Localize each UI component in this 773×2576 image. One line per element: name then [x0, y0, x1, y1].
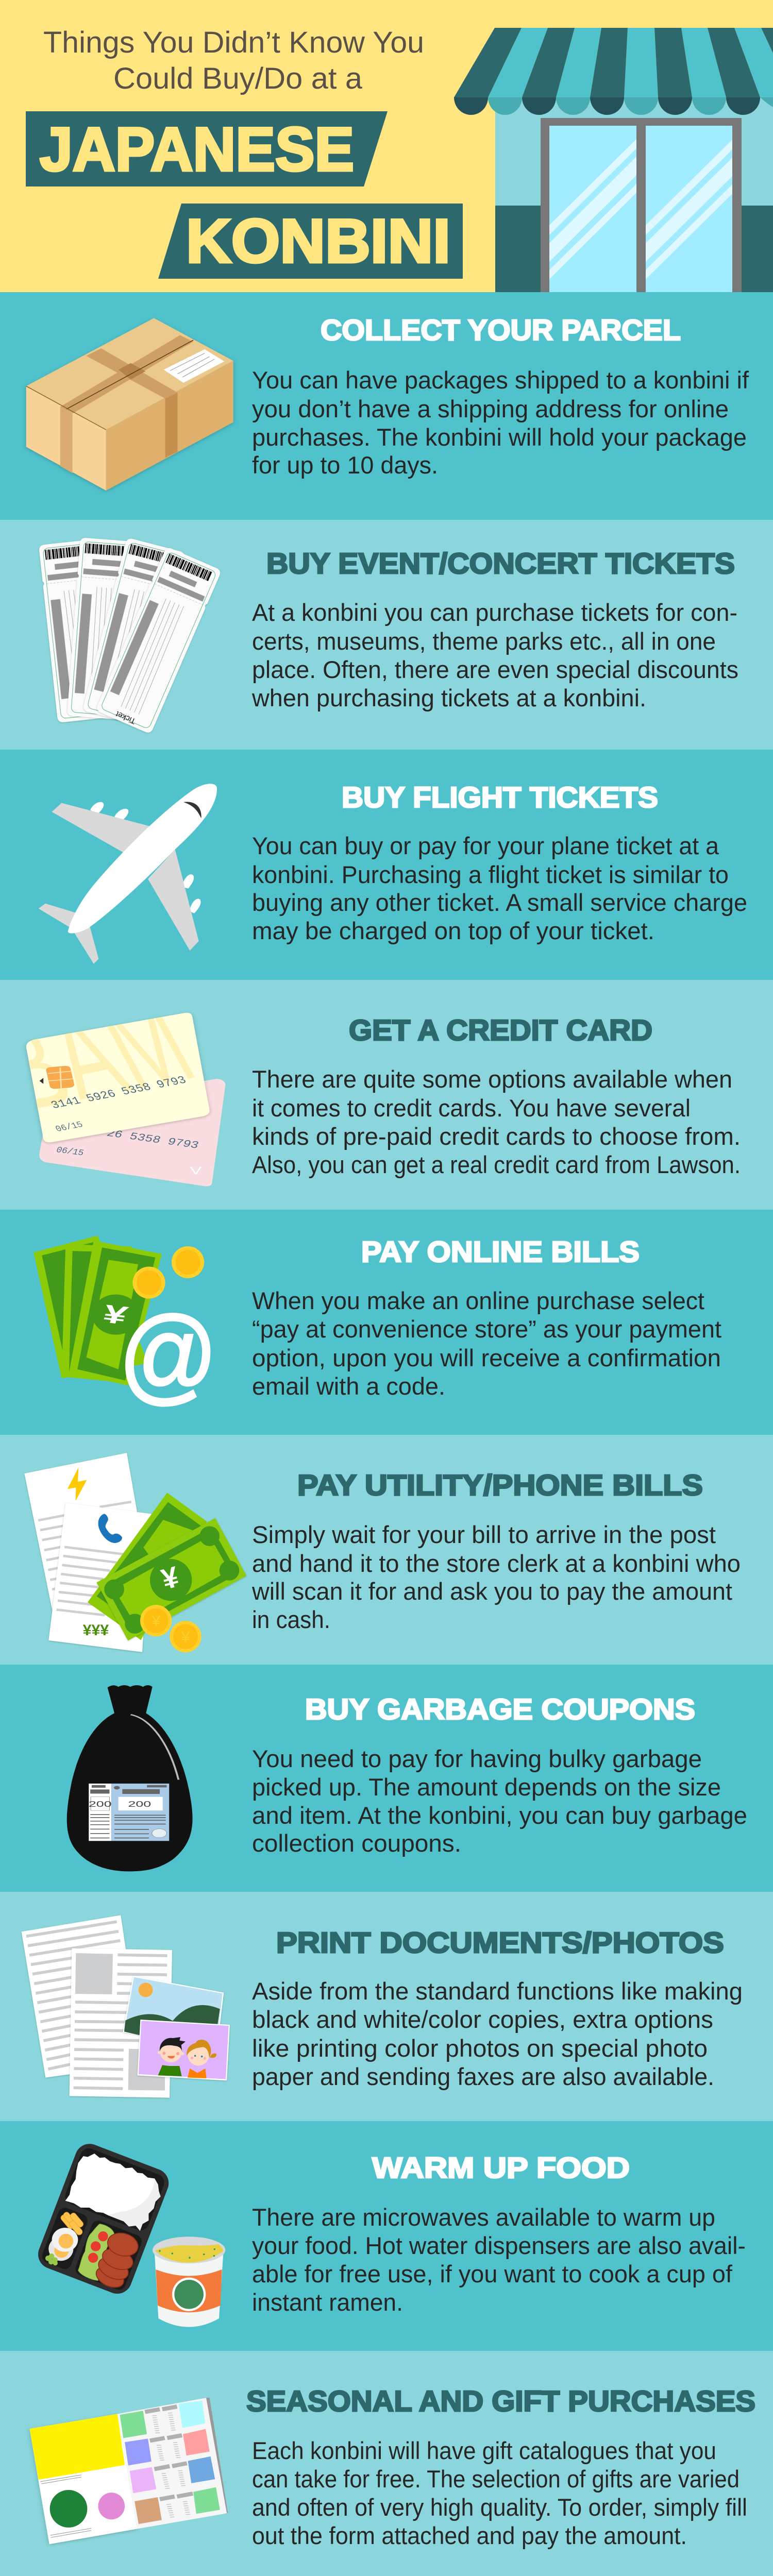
heading: tickets: BUY EVENT/CONCERT TICKETS [266, 547, 735, 580]
body text: print documents: Aside from the standard functions like making [252, 1977, 743, 2005]
body text: warm up food [252, 2204, 746, 2316]
panel: buy flight tickets [0, 750, 773, 980]
body text: credit card: There are quite some options available when [252, 1065, 732, 1093]
bento tray [34, 2140, 173, 2298]
heading: warm up food: WARM UP FOOD [372, 2151, 630, 2184]
body text: print documents [252, 1977, 743, 2090]
body text: tickets: certs, museums, theme parks etc., all in one [252, 628, 716, 655]
icon: credit cards: V [190, 1165, 201, 1177]
body text: flight tickets: buying any other ticket. A small service charge [252, 889, 747, 916]
icon: credit cards: 06/15 [55, 1145, 85, 1158]
body text: credit card: Also, you can get a real credit card from Lawson. [252, 1151, 741, 1178]
body text: seasonal and gift: can take for free. The selection of gifts are varied [252, 2465, 740, 2493]
body text: credit card: it comes to credit cards. You have several [252, 1094, 691, 1122]
body text: utility bills: in cash. [252, 1606, 330, 1633]
icon: cardboard box [26, 318, 233, 490]
panel: warm up food [0, 2121, 773, 2351]
body text: print documents: like printing color photos on special photo [252, 2035, 708, 2062]
panel: collect your parcel [0, 292, 773, 520]
body text: utility bills: Simply wait for your bill to arrive in the post [252, 1521, 716, 1548]
panel: buy garbage coupons [0, 1665, 773, 1892]
title: things you didn't know [43, 26, 424, 95]
icon: credit cards: 3141 5926 5358 9793 [48, 1074, 189, 1112]
title: things you didn't know: Could Buy/Do at a [113, 62, 363, 95]
body text: flight tickets: konbini. Purchasing a flight ticket is similar to [252, 861, 729, 888]
icon: banknotes, coins and at sign: ¥ [99, 1300, 131, 1330]
icon: garbage bag with coupon: 200 [128, 1800, 151, 1809]
body text: parcel [252, 366, 749, 479]
ramen cup [153, 2236, 225, 2327]
heading: flight tickets: BUY FLIGHT TICKETS [342, 781, 658, 814]
banner: konbini: KONBINI [186, 207, 450, 276]
body text: utility bills: and hand it to the store clerk at a konbini who [252, 1550, 741, 1577]
icon: gift catalogue [29, 2398, 228, 2544]
banner: japanese: JAPANESE [40, 115, 354, 184]
icon: airplane [39, 784, 217, 964]
icon: banknotes, coins and at sign: @ [119, 1295, 218, 1414]
icon: shop front [454, 28, 773, 292]
body text: print documents: black and white/color copies, extra options [252, 2006, 713, 2033]
header panel [0, 0, 773, 292]
body text: tickets: when purchasing tickets at a konbini. [251, 684, 646, 711]
body text: seasonal and gift: out the form attached and pay the amount. [252, 2522, 687, 2549]
body text: flight tickets: You can buy or pay for your plane ticket at a [252, 832, 719, 859]
body text: tickets: At a konbini you can purchase tickets for con- [252, 599, 737, 626]
body text: seasonal and gift: and often of very high quality. To order, simply fill [252, 2494, 747, 2521]
panel: buy event/concert tickets [0, 520, 773, 750]
body text: parcel: purchases. The konbini will hold your package [252, 423, 747, 451]
body text: parcel: for up to 10 days. [252, 451, 438, 479]
heading: credit card: GET A CREDIT CARD [349, 1014, 652, 1047]
icon: bento box and instant ramen cup [34, 2140, 225, 2327]
heading: collect your parcel: COLLECT YOUR PARCEL [321, 314, 681, 347]
photo: landscape [123, 1976, 224, 2042]
body text: garbage coupons [252, 1745, 747, 1857]
heading: online bills: PAY ONLINE BILLS [361, 1235, 640, 1268]
body text: credit card [252, 1065, 741, 1178]
photo: couple [138, 2020, 230, 2080]
body text: online bills: When you make an online purchase select [252, 1287, 704, 1314]
body text: print documents: paper and sending faxes are also available. [252, 2063, 714, 2090]
body text: seasonal and gift: Each konbini will have gift catalogues that you [252, 2437, 716, 2464]
icon: banknotes, coins and at sign [33, 1235, 218, 1414]
heading: utility bills: PAY UTILITY/PHONE BILLS [297, 1469, 703, 1502]
heading: garbage coupons: BUY GARBAGE COUPONS [305, 1693, 695, 1726]
body text: credit card: kinds of pre-paid credit cards to choose from. [252, 1123, 741, 1150]
body text: utility bills: will scan it for and ask you to pay the amount [251, 1578, 732, 1605]
title: things you didn't know: Things You Didn’t Know You [43, 26, 424, 59]
panel: pay utility/phone bills [0, 1435, 773, 1665]
icon: credit cards: 06/15 [54, 1120, 85, 1134]
icon: garbage bag with coupon [67, 1685, 193, 1871]
body text: garbage coupons: picked up. The amount depends on the size [252, 1773, 721, 1801]
body text: warm up food: your food. Hot water dispensers are also avail- [252, 2232, 746, 2259]
icon: documents and photos [22, 1915, 230, 2098]
icon: bills and yen notes [24, 1453, 246, 1652]
body text: parcel: You can have packages shipped to a konbini if [252, 366, 749, 394]
icon: fan of tickets [39, 537, 222, 734]
heading: seasonal and gift: SEASONAL AND GIFT PURCHASES [246, 2385, 755, 2418]
panel: get a credit card [0, 974, 773, 1210]
body text: garbage coupons: collection coupons. [252, 1829, 461, 1857]
body text: flight tickets: may be charged on top of your ticket. [252, 917, 654, 944]
body text: online bills: “pay at convenience store” as your payment [252, 1315, 721, 1343]
panel: seasonal and gift purchases [0, 2351, 773, 2576]
icon: bills and yen notes: ¥¥¥ [83, 1622, 109, 1639]
body text: warm up food: able for free use, if you want to cook a cup of [252, 2260, 733, 2287]
heading: print documents: PRINT DOCUMENTS/PHOTOS [276, 1926, 724, 1959]
body text: utility bills [251, 1521, 741, 1633]
body text: warm up food: There are microwaves available to warm up [252, 2204, 715, 2231]
body text: online bills: option, upon you will receive a confirmation [252, 1344, 721, 1371]
icon: bills and yen notes: ¥ [151, 1613, 161, 1630]
body text: seasonal and gift [252, 2437, 747, 2549]
icon: credit cards [24, 1012, 226, 1186]
body text: online bills: email with a code. [252, 1372, 445, 1400]
icon: credit cards: 26 5358 9793 [105, 1128, 200, 1151]
body text: tickets [251, 599, 738, 711]
icon: fan of tickets: Ticket [114, 709, 137, 725]
body text: online bills [252, 1287, 721, 1400]
panel: print documents/photos [0, 1892, 773, 2121]
icon: garbage bag with coupon: 200 [89, 1800, 112, 1809]
body text: garbage coupons: You need to pay for having bulky garbage [252, 1745, 702, 1772]
panel: pay online bills [0, 1210, 773, 1435]
body text: garbage coupons: and item. At the konbini, you can buy garbage [252, 1802, 747, 1829]
icon: bills and yen notes: ¥ [180, 1629, 190, 1646]
icon: bills and yen notes: ¥ [158, 1561, 182, 1596]
body text: parcel: you don’t have a shipping address for online [252, 395, 729, 422]
body text: tickets: place. Often, there are even special discounts [252, 656, 738, 683]
body text: flight tickets [252, 832, 747, 944]
body text: warm up food: instant ramen. [252, 2289, 403, 2316]
